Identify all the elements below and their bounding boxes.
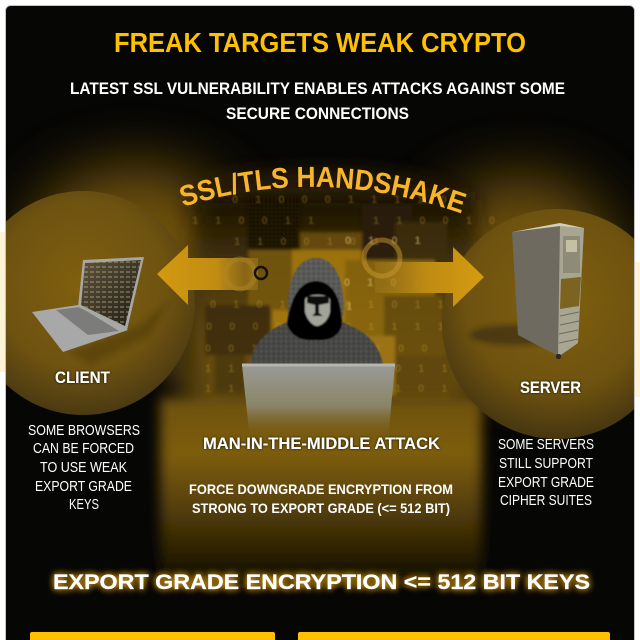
server circle: [442, 209, 640, 439]
binary digits: 0 1 0 1 1 0: [345, 299, 474, 311]
hood shadow: [287, 281, 342, 340]
export grade heading: EXPORT GRADE ENCRYPTION <= 512 BIT KEYS: [53, 570, 590, 594]
binary digits: 1 0 1 1: [395, 383, 478, 395]
pale glow on left page margin: [0, 232, 6, 372]
attack line 1: FORCE DOWNGRADE ENCRYPTION FROM: [189, 481, 453, 497]
client label: CLIENT: [55, 369, 110, 387]
server drive bays: [560, 277, 581, 309]
mosaic tiles: [205, 197, 450, 401]
subtitle line 2: SECURE CONNECTIONS: [226, 105, 409, 123]
right yellow box: [298, 632, 610, 640]
attack line 2: STRONG TO EXPORT GRADE (<= 512 BIT): [192, 500, 450, 516]
binary digits: 0 0 0 0: [206, 321, 289, 333]
binary digits: 1 1 0 1: [205, 383, 288, 395]
binary digits highlighted: 0 1 0 1: [345, 235, 428, 247]
binary mosaic backdrop: [195, 192, 475, 407]
server line 1: SOME SERVERS: [498, 436, 594, 453]
title: FREAK TARGETS WEAK CRYPTO: [114, 27, 526, 58]
arrow pointing to client: [157, 245, 258, 305]
arrow pointing to server: [375, 247, 484, 307]
server display: [563, 236, 580, 273]
server label: SERVER: [520, 379, 581, 397]
icon: laptop: [32, 257, 170, 365]
icon: server rack: [470, 223, 584, 359]
glow behind title arc: [220, 164, 438, 202]
laptop shadow: [72, 305, 166, 365]
dark ring: [255, 267, 267, 279]
server screen: [566, 240, 577, 252]
arc heading: SSL/TLS HANDSHAKE: [180, 166, 466, 214]
sunglasses: [307, 296, 329, 316]
shoulders: [250, 322, 383, 364]
binary digits: 0 1 1 1 1 0: [345, 321, 474, 333]
laptop screen code: [81, 260, 141, 326]
server lower slots: [559, 312, 579, 343]
laptop keyboard: [56, 307, 119, 335]
binary digits highlighted: [344, 236, 421, 310]
server description: [498, 436, 594, 509]
glow behind client: [30, 165, 240, 325]
laptop screen: [81, 260, 141, 326]
binary digits: 1 1 0 0 1 0 1: [234, 236, 386, 248]
client line 1: SOME BROWSERS: [28, 422, 140, 439]
binary digits highlighted: 0 1 0 1 0: [344, 277, 450, 289]
left yellow box: [30, 632, 275, 640]
client line 2: CAN BE FORCED: [33, 440, 134, 457]
shoulders texture: [250, 326, 382, 364]
laptop base: [32, 305, 128, 352]
client circle: [0, 191, 195, 415]
glow between client and attacker: [158, 316, 208, 401]
hacker figure: [250, 258, 383, 364]
client line 4: EXPORT GRADE: [35, 478, 132, 495]
binary digits: 0 0 1: [205, 343, 264, 355]
artwork: central illustration: [0, 165, 640, 588]
server front panel: [558, 225, 584, 357]
attacker laptop lid: [242, 365, 395, 440]
client description: [28, 422, 140, 513]
gear ring right: [364, 240, 400, 276]
binary digits: 1 1 0 0 1 1: [192, 215, 321, 227]
binary digits: 1 1 0 0 1 0: [373, 215, 502, 227]
binary digits: 0 1 0 0 0 1 1 1 1 0: [232, 194, 454, 206]
attack heading: MAN-IN-THE-MIDDLE ATTACK: [203, 435, 440, 453]
binary digits: 1 0 0 1 1: [375, 343, 481, 355]
hood: [287, 257, 344, 320]
binary digits highlighted: 1: [346, 301, 359, 313]
server line 2: STILL SUPPORT: [499, 455, 593, 472]
laptop lid: [78, 257, 144, 330]
client line 3: TO USE WEAK: [40, 459, 127, 476]
server shadow: [470, 325, 560, 345]
pale glow on right page margin: [634, 262, 640, 397]
attack description: [189, 481, 453, 516]
attacker laptop top edge: [242, 364, 395, 366]
server line 3: EXPORT GRADE: [498, 474, 594, 491]
subtitle line 1: LATEST SSL VULNERABILITY ENABLES ATTACKS AGAINST SOME: [70, 80, 565, 98]
subtitle: [70, 80, 565, 123]
hood texture: [288, 258, 342, 314]
face: [305, 295, 330, 326]
gear ring left: [225, 259, 255, 289]
server foot: [556, 354, 561, 359]
glow behind server: [430, 140, 634, 257]
binary digits: 0 1 0 1 1: [210, 299, 316, 311]
binary digits: 0 1 1: [395, 363, 454, 375]
bottom central glow: [160, 398, 482, 588]
binary digits: [192, 194, 502, 395]
client line 5: KEYS: [69, 496, 99, 513]
server top edge: [512, 223, 584, 232]
server side panel: [512, 225, 560, 357]
server line 4: CIPHER SUITES: [500, 492, 592, 509]
binary digits: 1 1 1: [205, 363, 264, 375]
